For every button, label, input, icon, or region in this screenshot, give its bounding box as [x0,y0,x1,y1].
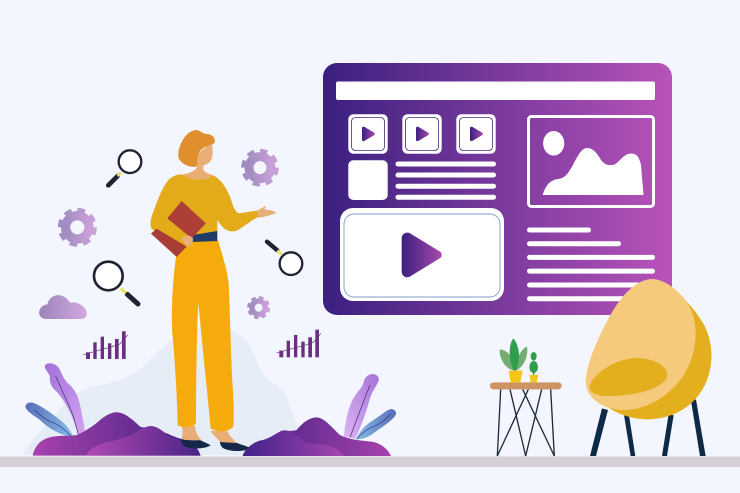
right plant blue leaf [356,409,396,439]
table legs [497,389,554,456]
video thumbnail 2 [402,114,442,154]
right hand [256,206,276,218]
right plant [344,374,396,439]
gear small [249,298,268,317]
chair [586,279,711,456]
right mounds [243,417,391,456]
video thumbnail 1 [348,114,388,154]
person [178,130,276,218]
chair legs [590,399,706,456]
bar chart left [83,331,128,359]
holding hand [181,236,193,246]
right mound back [243,417,391,456]
folder back cover [151,229,187,257]
right plant blue vein [357,414,391,439]
right plant big leaf [344,374,379,439]
feet [181,426,237,443]
potted plant small [529,352,538,382]
person and floating icons [25,130,321,456]
shoes [181,439,251,451]
magnifier right [267,242,302,275]
right mound front [243,430,344,456]
text lines left [396,162,496,200]
trousers [172,240,234,431]
chair inner [586,279,696,410]
side table with plants [490,338,562,456]
chair back shell [605,279,711,419]
right plant vein [350,385,370,437]
play button [402,233,442,277]
cloud [39,295,87,319]
large video player [340,208,504,301]
chair seat [589,358,667,396]
gear top right [244,152,276,184]
bar chart right [277,330,321,357]
image placeholder [528,116,654,206]
panel: video website [323,63,672,315]
magnifier top [108,150,141,185]
background hill [23,326,310,455]
magnifier left [94,262,138,304]
text lines right [527,228,655,301]
belt [193,231,217,242]
folder [151,201,206,257]
left plant [25,363,85,437]
folder front cover [167,201,206,238]
gear left [61,211,94,244]
table top [490,382,562,389]
video thumbnail 3 [456,114,496,154]
hair [178,130,215,167]
white square [348,160,388,200]
face and neck [181,144,213,180]
left mounds [33,412,201,456]
potted plant large [500,338,527,382]
floor [0,456,740,467]
address bar [336,82,655,100]
sweater [150,174,258,250]
